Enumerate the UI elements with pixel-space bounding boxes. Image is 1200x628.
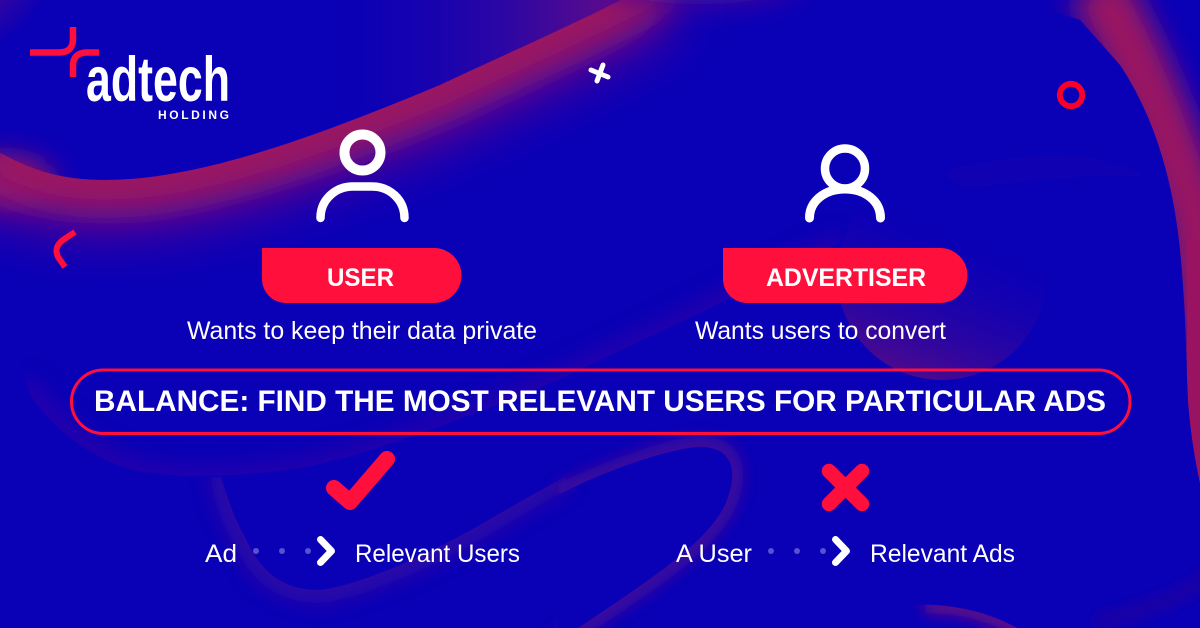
label: advertiser (723, 248, 967, 303)
text: advertiser description: Wants users to convert (695, 317, 946, 345)
decoration: red arc (57, 232, 75, 267)
icon: check mark (334, 459, 387, 502)
decoration: red ring (1060, 84, 1082, 106)
icon: cross mark (829, 471, 862, 504)
logo: adtech holding (30, 27, 232, 122)
panel: wrong approach (676, 471, 1015, 568)
dots (253, 548, 311, 554)
panel: correct approach (205, 459, 520, 568)
icon: user (320, 134, 404, 218)
label: user: USER (327, 264, 394, 292)
text: relevant ads: Relevant Ads (870, 540, 1015, 568)
label: advertiser: ADVERTISER (766, 264, 926, 292)
logo wordmark: adtech (86, 45, 230, 115)
callout: balance (72, 370, 1130, 434)
panel: advertiser (695, 148, 967, 345)
text: user description: Wants to keep their data private (187, 317, 537, 345)
label: user (262, 248, 462, 303)
logo subtitle: HOLDING (158, 108, 232, 122)
text: a user: A User (676, 540, 752, 568)
panel: user (187, 134, 537, 345)
dots (768, 548, 826, 554)
icon: advertiser (810, 148, 880, 218)
decoration: white cross (591, 65, 608, 81)
arrow (836, 540, 846, 562)
arrow (320, 540, 332, 562)
logo mark (30, 27, 99, 77)
text: relevant users: Relevant Users (355, 540, 520, 568)
text: ad: Ad (205, 540, 237, 568)
callout: balance: BALANCE: FIND THE MOST RELEVANT USERS FOR PARTICULAR ADS (94, 385, 1106, 418)
